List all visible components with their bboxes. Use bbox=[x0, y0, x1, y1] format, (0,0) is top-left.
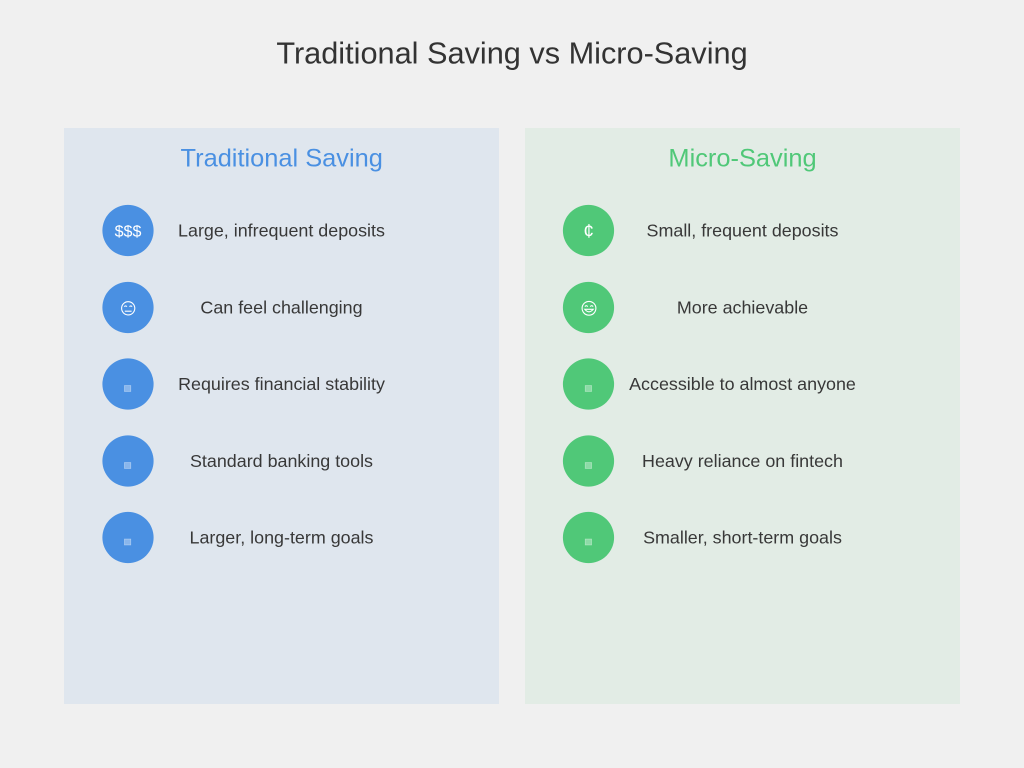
row: smaller, short-term goals: Smaller, short-term goals bbox=[643, 528, 842, 548]
row: large, infrequent deposits: $$$ bbox=[115, 224, 141, 240]
row: accessible to almost anyone bbox=[563, 358, 856, 410]
row: smaller, short-term goals bbox=[563, 512, 842, 563]
title: Traditional Saving vs Micro-Saving bbox=[276, 36, 748, 70]
row: small, frequent deposits bbox=[563, 205, 839, 256]
row: larger, long-term goals: Larger, long-term goals bbox=[190, 528, 374, 548]
row: standard banking tools bbox=[102, 435, 373, 487]
row: more achievable: More achievable bbox=[677, 298, 808, 318]
panel: traditional saving bbox=[64, 128, 499, 704]
row: requires financial stability: Requires financial stability bbox=[178, 374, 385, 394]
heading: micro-saving: Micro-Saving bbox=[668, 144, 817, 172]
row: can feel challenging bbox=[102, 282, 363, 333]
row: requires financial stability bbox=[102, 358, 385, 410]
row: accessible to almost anyone: Accessible to almost anyone bbox=[629, 374, 856, 394]
panel: micro-saving bbox=[525, 128, 960, 704]
row: more achievable bbox=[563, 282, 808, 333]
row: heavy reliance on fintech: Heavy reliance on fintech bbox=[642, 451, 843, 471]
row: larger, long-term goals bbox=[102, 512, 374, 563]
row: can feel challenging: Can feel challenging bbox=[200, 298, 363, 318]
row: large, infrequent deposits bbox=[102, 205, 385, 256]
row: small, frequent deposits: ¢ bbox=[583, 222, 594, 242]
heading: traditional saving: Traditional Saving bbox=[181, 144, 383, 172]
row: standard banking tools: Standard banking tools bbox=[190, 451, 373, 471]
row: heavy reliance on fintech bbox=[563, 435, 843, 487]
row: large, infrequent deposits: Large, infrequent deposits bbox=[178, 220, 385, 240]
row: small, frequent deposits: Small, frequent deposits bbox=[647, 220, 839, 240]
